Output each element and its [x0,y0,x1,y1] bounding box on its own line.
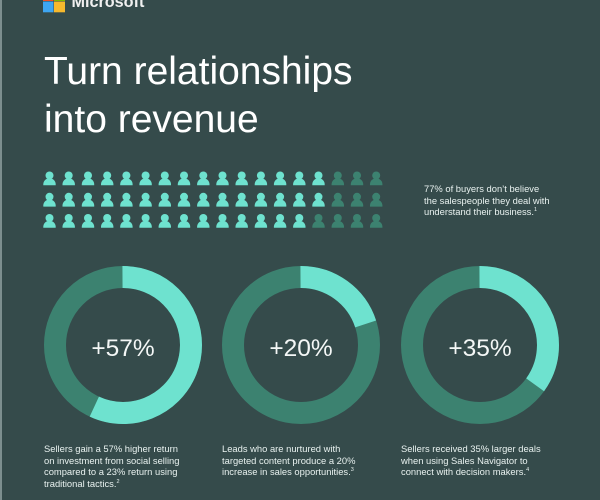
caption: Sales Navigator: Sellers received 35% larger deals [401,443,541,454]
stat text: 77% of buyers: 77% of buyers don’t believe [424,183,539,194]
stat text: 77% of buyers [424,183,550,217]
caption: nurtured leads [222,443,356,477]
caption: social selling: compared to a 23% return using [44,466,177,477]
title [44,50,353,140]
stat text: 77% of buyers: understand their business.1 [424,206,537,217]
Microsoft logo [43,0,144,12]
caption: social selling: on investment from social selling [44,455,179,466]
caption: Sales Navigator [401,443,541,477]
caption: nurtured leads: increase in sales opportunities.3 [222,466,354,477]
caption: nurtured leads: targeted content produce a 20% [222,455,355,466]
caption: social selling: Sellers gain a 57% higher return [44,443,178,454]
donut chart: +35% [401,266,559,424]
donut chart: +20% [222,266,380,424]
caption: social selling [44,443,179,489]
caption: nurtured leads: Leads who are nurtured with [222,443,340,454]
caption: Sales Navigator: when using Sales Navigator to [401,455,528,466]
icon: Microsoft squares [43,0,65,12]
value: +57% [91,334,155,362]
value: +35% [448,334,512,362]
caption: social selling: traditional tactics.2 [44,478,120,489]
title: into revenue [44,98,259,140]
caption: Sales Navigator: connect with decision makers.4 [401,466,529,477]
value: +20% [269,334,333,362]
title: Turn relationships [44,50,353,92]
icon grid: people [43,172,382,228]
donut chart: +57% [44,266,202,424]
stat text: 77% of buyers: the salespeople they deal with [424,195,550,206]
